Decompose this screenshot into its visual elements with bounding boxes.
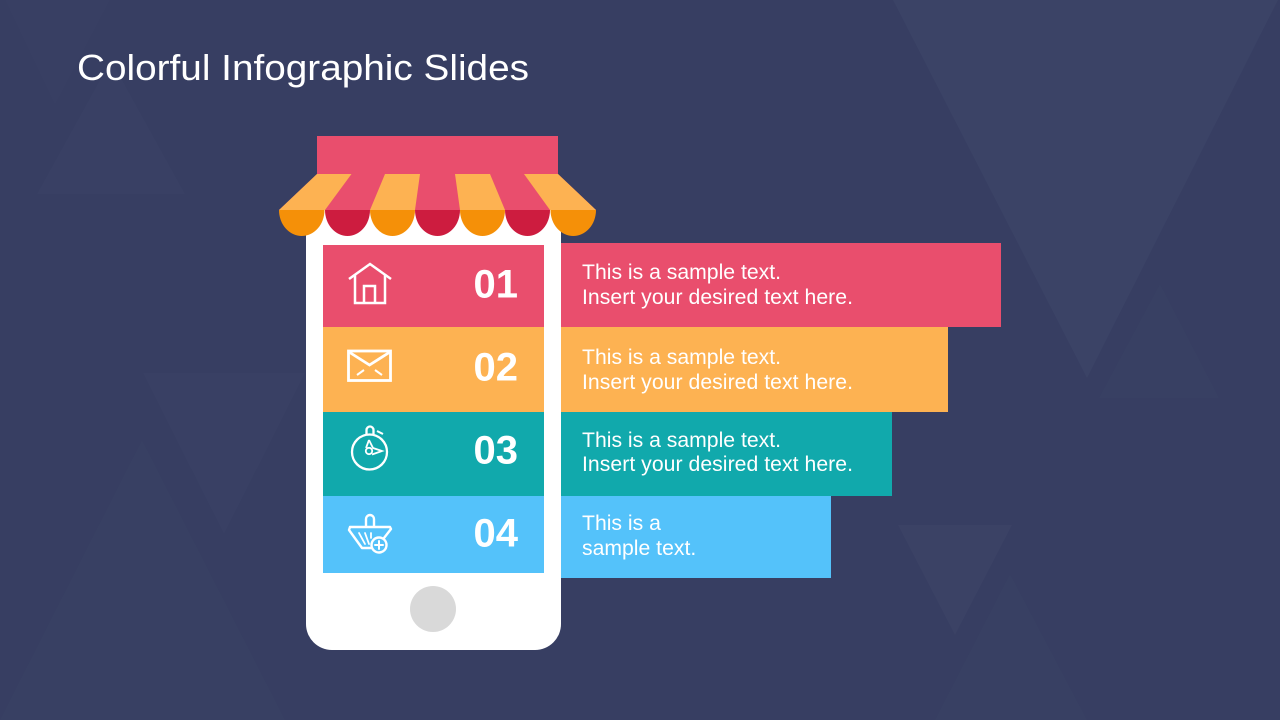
icon: basket: [349, 515, 391, 552]
number 03: 03: [474, 428, 518, 472]
text 03: This is a sample text.: [582, 429, 781, 452]
shop awning: [279, 136, 596, 236]
icon: house: [349, 264, 391, 303]
icon: envelope: [348, 351, 390, 380]
step 04 row: [323, 496, 831, 578]
number 04: 04: [474, 512, 519, 556]
step 02 row: Insert your desired text here.: [582, 371, 853, 394]
title: Colorful Infographic Slides: [77, 47, 529, 88]
number 01: 01: [474, 262, 518, 306]
text 01: This is a sample text.: [582, 261, 781, 284]
step 01 row: [323, 243, 1001, 327]
step 04 row: sample text.: [582, 537, 696, 560]
icon: stopwatch: [352, 426, 387, 470]
text 02: This is a sample text.: [582, 346, 781, 369]
step 03 row: Insert your desired text here.: [582, 453, 853, 476]
step 02 row: [323, 327, 948, 412]
step 01 row: Insert your desired text here.: [582, 286, 853, 309]
number 02: 02: [474, 346, 518, 390]
phone body: [306, 200, 561, 650]
text 04: This is a: [582, 512, 661, 535]
step 03 row: [323, 412, 892, 496]
phone home button: [410, 586, 456, 632]
